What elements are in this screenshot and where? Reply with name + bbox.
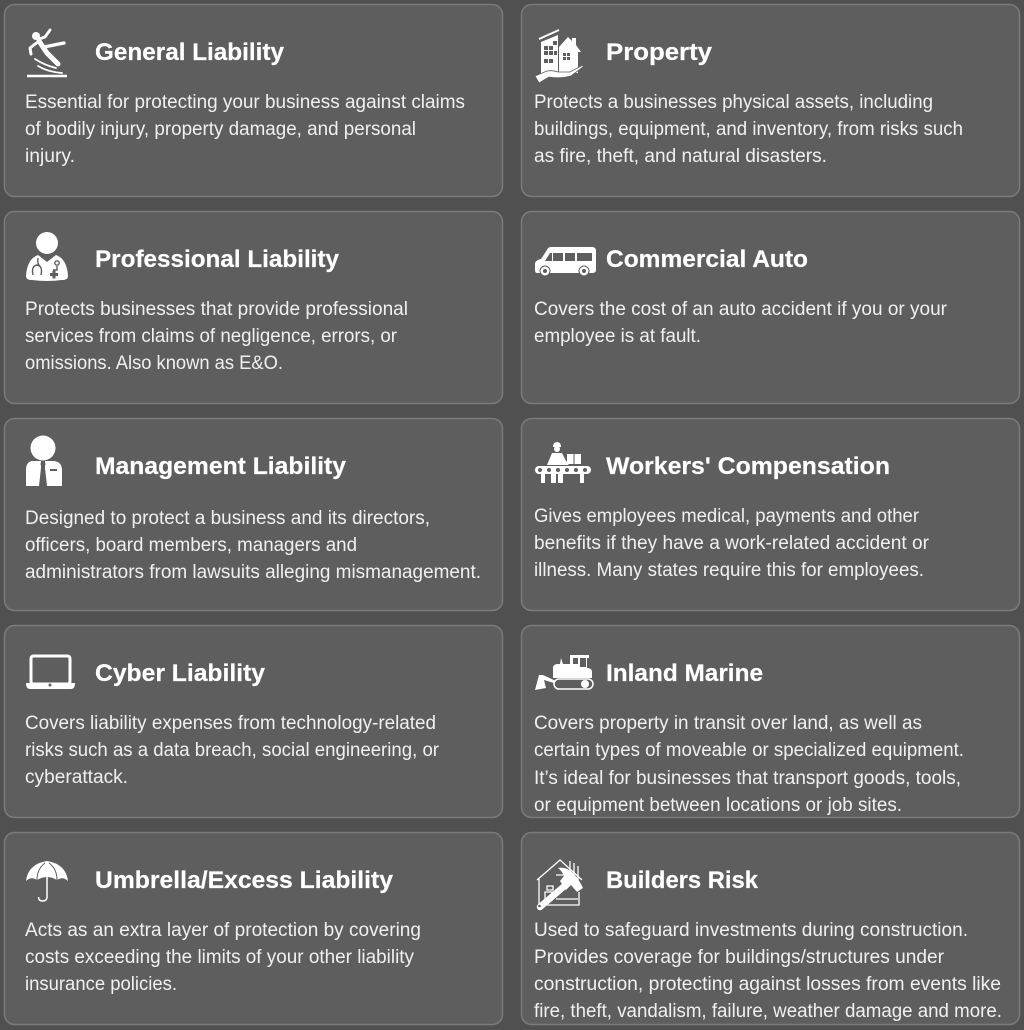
- panel: Umbrella/Excess Liability: [4, 832, 502, 1024]
- text block: insurance policies.: [25, 974, 177, 995]
- icon: worker at conveyor: [535, 442, 591, 483]
- text block: [534, 92, 963, 167]
- heading: General Liability: [95, 39, 285, 66]
- text block: illness. Many states require this for employees.: [534, 560, 924, 581]
- text block: risks such as a data breach, social engineering, or: [25, 740, 440, 761]
- icon: manager: [26, 436, 62, 486]
- text block: cyberattack.: [25, 767, 128, 788]
- text block: benefits if they have a work-related accident or: [534, 533, 930, 554]
- icon: umbrella: [26, 861, 68, 901]
- text block: [25, 713, 440, 788]
- heading: Workers' Compensation: [606, 453, 890, 480]
- text block: [25, 920, 421, 995]
- text block: [25, 508, 481, 583]
- text block: as fire, theft, and natural disasters.: [534, 146, 827, 167]
- text block: [25, 299, 408, 374]
- text block: [534, 713, 964, 816]
- text block: Acts as an extra layer of protection by covering: [25, 920, 421, 941]
- heading: Cyber Liability: [95, 660, 266, 687]
- text block: fire, theft, vandalism, failure, weather damage and more.: [534, 1001, 1002, 1022]
- icon: laptop: [26, 656, 75, 689]
- text block: [534, 506, 930, 581]
- text block: [534, 920, 1002, 1022]
- panel: General Liability: [4, 4, 502, 196]
- text block: employee is at fault.: [534, 326, 701, 347]
- panel: Commercial Auto: [522, 212, 1020, 404]
- text block: omissions. Also known as E&O.: [25, 353, 283, 374]
- panel: Builders Risk: [522, 832, 1020, 1024]
- text block: Covers the cost of an auto accident if you or your: [534, 299, 948, 320]
- icon: van: [535, 247, 596, 276]
- heading: Professional Liability: [95, 246, 340, 273]
- text block: of bodily injury, property damage, and personal: [25, 119, 416, 140]
- panel: Management Liability: [4, 418, 502, 610]
- icon: house and hammer: [537, 860, 583, 907]
- panel: Workers' Compensation: [522, 418, 1020, 610]
- icon: buildings on a hand: [535, 30, 583, 83]
- text block: construction, protecting against losses from events like: [534, 974, 1001, 995]
- text block: Used to safeguard investments during construction.: [534, 920, 968, 941]
- heading: Management Liability: [95, 453, 347, 480]
- text block: [25, 92, 465, 167]
- icon: bulldozer: [535, 655, 593, 690]
- panel: Property: [522, 4, 1020, 196]
- text block: Designed to protect a business and its directors,: [25, 508, 430, 529]
- icon: person slipping: [27, 30, 67, 76]
- text block: Essential for protecting your business against claims: [25, 92, 465, 113]
- text block: Gives employees medical, payments and other: [534, 506, 920, 527]
- heading: Inland Marine: [606, 660, 763, 687]
- heading: Property: [606, 39, 713, 66]
- text block: Protects businesses that provide professional: [25, 299, 408, 320]
- panel: Professional Liability: [4, 212, 502, 404]
- text block: administrators from lawsuits alleging mismanagement.: [25, 562, 481, 583]
- text block: Covers property in transit over land, as well as: [534, 713, 922, 734]
- text block: injury.: [25, 146, 75, 167]
- text block: [534, 299, 948, 347]
- panel: Inland Marine: [522, 626, 1020, 818]
- text block: officers, board members, managers and: [25, 535, 357, 556]
- panel: Cyber Liability: [4, 626, 502, 818]
- heading: Builders Risk: [606, 867, 759, 894]
- text block: Protects a businesses physical assets, including: [534, 92, 933, 113]
- heading: Umbrella/Excess Liability: [95, 867, 394, 894]
- icon: doctor: [26, 232, 68, 281]
- text block: or equipment between locations or job sites.: [534, 795, 902, 816]
- text block: certain types of moveable or specialized equipment.: [534, 740, 964, 761]
- text block: costs exceeding the limits of your other liability: [25, 947, 414, 968]
- text block: Covers liability expenses from technology-related: [25, 713, 436, 734]
- text block: It’s ideal for businesses that transport goods, tools,: [534, 768, 961, 789]
- text block: buildings, equipment, and inventory, from risks such: [534, 119, 963, 140]
- text block: services from claims of negligence, errors, or: [25, 326, 398, 347]
- heading: Commercial Auto: [606, 246, 808, 273]
- text block: Provides coverage for buildings/structures under: [534, 947, 945, 968]
